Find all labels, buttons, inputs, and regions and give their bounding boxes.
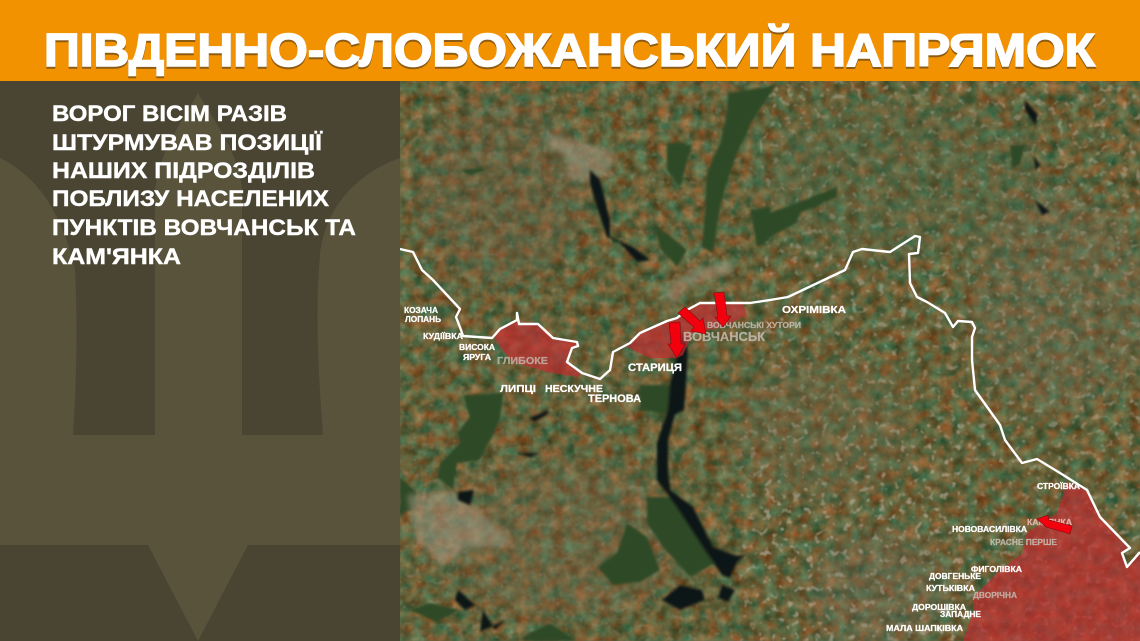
- panel text: ВОРОГ ВІСІМ РАЗІВ: [52, 101, 287, 126]
- panel text: НАШИХ ПІДРОЗДІЛІВ: [52, 158, 315, 183]
- map labels: НОВОВАСИЛІВКА: [952, 525, 1027, 534]
- attack arrows: [668, 292, 1072, 534]
- map labels: СТАРИЦЯ: [628, 362, 682, 374]
- map labels: ДВОРІЧНА: [973, 591, 1017, 600]
- map labels: КАМ'ЯНКА: [1027, 518, 1072, 527]
- map labels: ЯРУГА: [463, 353, 491, 362]
- arrow: Kamianka: [1037, 515, 1072, 534]
- left panel: [0, 80, 400, 641]
- map labels: МАЛА ШАПКІВКА: [886, 624, 963, 633]
- map labels: ЛОПАНЬ: [405, 315, 441, 324]
- occupied zone: Kamianka: [963, 483, 1140, 641]
- panel text: ПОБЛИЗУ НАСЕЛЕНИХ: [52, 186, 329, 211]
- arrow: north Vovchansk: [678, 307, 706, 334]
- map labels: НЕСКУЧНЕ: [545, 384, 603, 395]
- map labels: ЛИПЦІ: [500, 384, 536, 395]
- map labels: КОЗАЧА: [404, 306, 438, 315]
- occupied zone: Vovchansk: [627, 303, 747, 358]
- satellite map: [400, 80, 1140, 641]
- panel text: ПУНКТІВ ВОВЧАНСЬК ТА: [52, 215, 356, 240]
- water: rivers and reservoirs: [455, 100, 1050, 632]
- panel text: ШТУРМУВАВ ПОЗИЦІЇ: [52, 130, 323, 155]
- map labels: ОХРІМІВКА: [782, 304, 846, 316]
- arrow: north-east Vovchansk: [714, 292, 731, 327]
- trident emblem watermark: [0, 93, 400, 641]
- map labels: ВИСОКА: [459, 343, 495, 352]
- map labels: ДОРОШІВКА: [912, 603, 966, 612]
- forests: [400, 82, 1025, 641]
- map labels: ВОВЧАНСЬК: [683, 329, 765, 344]
- panel text: [52, 101, 356, 269]
- map labels: ВОВЧАНСЬКІ ХУТОРИ: [707, 321, 801, 330]
- arrow: west Vovchansk: [668, 322, 685, 358]
- map labels: ЗАПАДНЕ: [940, 610, 982, 619]
- map labels: ГЛИБОКЕ: [497, 356, 548, 367]
- map labels: [404, 304, 1080, 633]
- panel text: КАМ'ЯНКА: [52, 244, 181, 269]
- occupied zone: Hlyboke: [495, 313, 582, 377]
- map labels: КУТЬКІВКА: [926, 584, 975, 593]
- map labels: ФИГОЛІВКА: [971, 565, 1022, 574]
- cities: [407, 132, 735, 565]
- map labels: ТЕРНОВА: [588, 393, 641, 405]
- border line: [400, 236, 1140, 567]
- map labels: КРАСНЕ ПЕРШЕ: [990, 538, 1058, 547]
- header bar: [0, 0, 1140, 81]
- map labels: ДОВГЕНЬКЕ: [929, 572, 982, 581]
- map labels: КУДІЇВКА: [423, 332, 463, 341]
- map labels: СТРОЇВКА: [1037, 482, 1080, 491]
- title: ПІВДЕННО-СЛОБОЖАНСЬКИЙ НАПРЯМОК: [44, 24, 1096, 76]
